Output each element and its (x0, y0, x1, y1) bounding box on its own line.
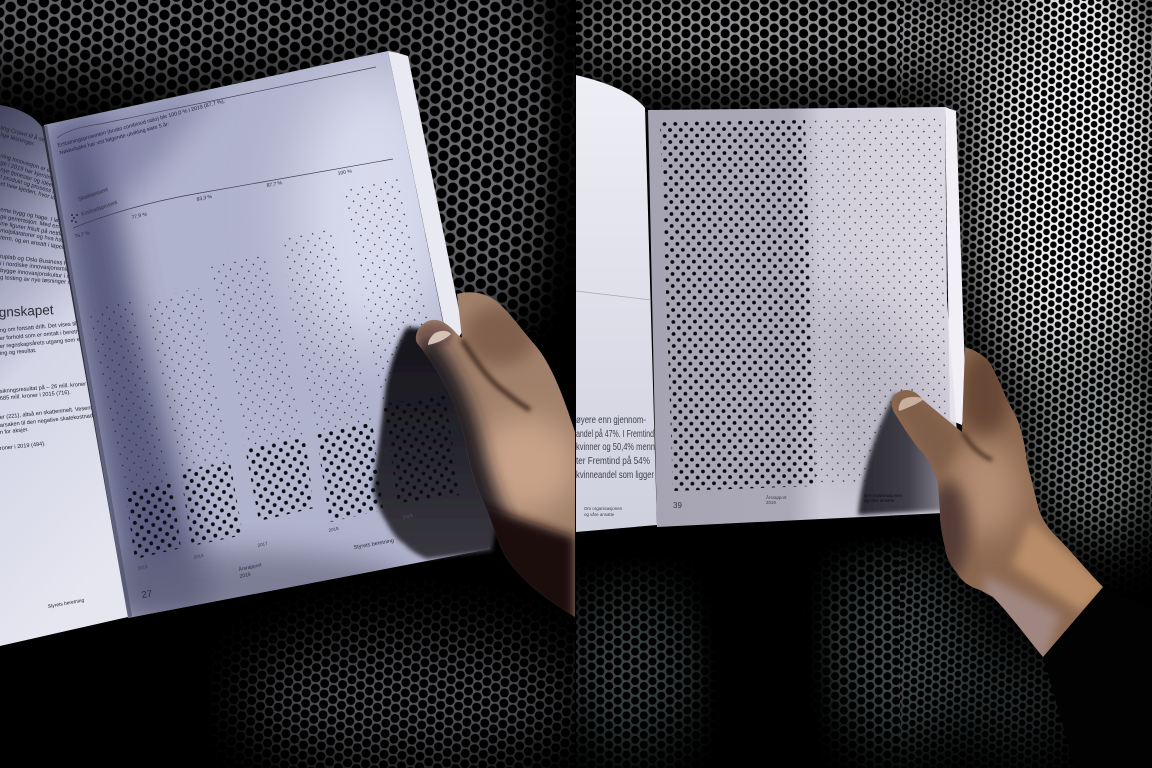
bar values: 77,9 % (131, 211, 148, 221)
heading: regnskapet: gnskapet (0, 302, 54, 320)
left page text: ine figurer friluft på nettleveranser (0, 220, 86, 242)
thumb top tone (417, 322, 453, 348)
bar 2015 (90, 300, 181, 559)
left page text: 685 mill. kroner i 2015 (716). (0, 390, 72, 402)
finger tone (961, 350, 1009, 440)
left page text: nye tjenester og idéer (0, 167, 55, 189)
bar 2018 (280, 228, 383, 522)
year labels: 2017 (257, 541, 268, 548)
bar values: 76,7 % (74, 230, 91, 240)
left page text: er forhold som er omtalt i beretningen (0, 328, 93, 342)
left page text: g testing av nye løsninger som vil (0, 275, 86, 287)
light shadow on page (800, 295, 945, 505)
back page text: kvinner og 50,4% menn (576, 441, 655, 453)
back page text: øyere enn gjennom- (576, 414, 646, 426)
year labels: 2018 (328, 526, 339, 533)
black shadow lower left (0, 610, 210, 768)
legend (71, 187, 119, 223)
left page text: arsaken til den negative skatekostnaden (0, 413, 99, 429)
shadow under book (856, 526, 931, 548)
dense dot column (660, 120, 816, 491)
top rule (57, 67, 376, 138)
right page footer: 2019 (766, 500, 776, 505)
left page text: ning innovasjon er en av (0, 153, 61, 177)
left book page (0, 105, 128, 646)
thumbnail (428, 331, 451, 345)
left page text: ting Crowd til å se (0, 124, 46, 144)
back page text: andel på 47%. I Fremtind (576, 428, 654, 440)
left page text (0, 126, 93, 608)
bar values: 100 % (337, 169, 353, 177)
shadowed footer label: Om organisasjonen (864, 493, 903, 498)
back page (576, 75, 657, 532)
left page text: Styrets beretning (47, 598, 85, 610)
left page text: n for aksjer. (0, 427, 29, 436)
page block edge (945, 107, 966, 425)
year labels (137, 526, 339, 571)
sleeve (1043, 587, 1152, 768)
left page text: i i nordiske innovasjonsmiljøer (0, 261, 77, 274)
right page footer (673, 495, 787, 510)
left page text: ge i 2019 har kjerningen (0, 160, 61, 184)
lit back of hand (949, 442, 1021, 538)
intro text: Erstatningsprosenten (brutto combined ratio) ble 100,0 % i 2019 (87,7 %). (57, 98, 226, 149)
shadow along inner thumb (420, 345, 495, 530)
spine shadow (42, 125, 132, 618)
chart rule (73, 159, 393, 228)
intro text: Nøkkeltallet har vist følgende utvikling siste 5 år: (59, 120, 170, 156)
left page text: eme bygg og hage. I løpet av (0, 207, 75, 227)
right photo (550, 0, 1152, 768)
perforated metal background: right (550, 0, 1152, 768)
left hand (416, 292, 575, 617)
palm shadow (928, 480, 968, 580)
left page text: molpilatatorer og hva har. Fremtind (0, 228, 89, 248)
back page text (576, 414, 655, 517)
bar 2019 dense dots inside the hand shadow (383, 395, 460, 503)
perforated metal background: left (0, 0, 585, 768)
bar 2019 (346, 179, 427, 400)
left page text: term, og en ansatt i løpet av året. (0, 234, 85, 254)
left page text: t produkt og prosess for (0, 174, 60, 197)
footer: page number and titles: Årsrapport (238, 561, 263, 573)
crease between thumb and finger (962, 432, 992, 460)
bar 2018 dense dots near shadow edge (362, 421, 383, 512)
bar values: 83,3 % (196, 194, 213, 203)
right page footer: Årsrapport (766, 495, 787, 500)
left page text: ng om fortsatt drift. Det vises til redegjørelse (0, 318, 109, 334)
left page text: bygge innovasjonskultur i selskapet (0, 268, 92, 282)
thumb tone (893, 398, 960, 480)
shadowed footer label: og våre ansatte (864, 498, 895, 503)
pale inner wrist (985, 575, 1060, 665)
left page text: roner i 2019 (494). (0, 441, 46, 452)
bar values: 87,7 % (266, 180, 283, 189)
left page text: lige løsninger. (0, 132, 36, 148)
right hand (885, 340, 1110, 665)
black vertical shadow band (701, 588, 826, 720)
lit palm (473, 417, 577, 513)
back page text: og våre ansatte (584, 512, 615, 517)
dark seam band (542, 0, 575, 292)
footer: page number and titles: Styrets beretning (353, 538, 394, 551)
shadowed footer label (864, 493, 903, 503)
fold line on back page (576, 291, 651, 300)
label 2019 in shadow: 2019 (402, 513, 413, 520)
footer: page number and titles: 2019 (239, 572, 252, 580)
legend: Skadeprosent (78, 187, 109, 203)
left page text: er (221), altså en skattenmelt. Vesentlig (0, 404, 98, 421)
hand shadow on page (373, 327, 500, 559)
left page text: tuplab og Oslo Business Forum (0, 254, 81, 268)
back page text: kvinneandel som ligger (576, 469, 654, 481)
bar 2016 (148, 288, 243, 546)
thumbnail (899, 397, 924, 411)
legend icon: dense dots (71, 214, 78, 223)
year labels: 2016 (193, 553, 204, 560)
finger tone (464, 305, 536, 365)
legend: Kostnadsprosent (81, 200, 119, 218)
right page footer: 39 (673, 501, 682, 510)
bar values (74, 169, 353, 240)
left page text: ing og resultat. (0, 348, 37, 357)
book page: chart page (40, 40, 500, 630)
hand shadow on right page (858, 393, 948, 515)
year labels: 2015 (137, 564, 148, 571)
footer: page number and titles (141, 538, 394, 601)
left page text: er regnskapsårets utgang som er av (0, 335, 90, 350)
lit wrist (1012, 520, 1108, 612)
book edge: page block (388, 51, 463, 339)
left photo (0, 0, 585, 768)
light dot column (805, 118, 946, 486)
right book page (648, 107, 963, 527)
back page text: ter Fremtind på 54% (576, 455, 650, 467)
left page text: ge generasjon. Med en rekke (0, 214, 75, 233)
crease between thumb and finger (462, 340, 530, 410)
left page text: et hele kjeden, hvor vi kan (0, 181, 66, 204)
shadow across lower hand (480, 505, 575, 625)
left page text: sikringsresultat på – 26 mill. kroner (251) (0, 379, 101, 395)
dot bar chart: five years (90, 177, 445, 559)
back page text: Om organisasjonen (584, 506, 623, 511)
bar 2017 (210, 255, 314, 521)
footer: page number and titles: 27 (141, 589, 153, 601)
